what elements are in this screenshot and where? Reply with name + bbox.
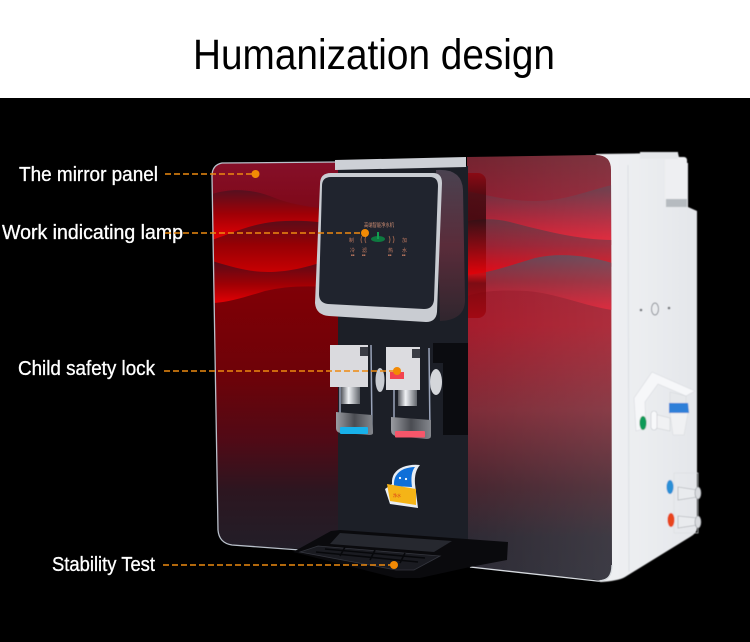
- right faucet (hot) with child lock: [386, 347, 442, 439]
- callout: the mirror panel: [19, 164, 260, 186]
- water inlet tube: [640, 152, 687, 207]
- callout: stability test: [52, 554, 398, 576]
- indicator icons: 水: [402, 247, 407, 254]
- white side body: [590, 152, 701, 582]
- side water tap: [634, 372, 695, 435]
- indicator icons: ■■: [362, 253, 366, 257]
- centre black column: [338, 166, 468, 542]
- title: Humanization design: [193, 31, 555, 79]
- right panel edge highlight: [470, 565, 612, 581]
- side mount screw holes: [640, 303, 670, 315]
- indicator icons: ■■: [388, 253, 392, 257]
- indicator icons: 冷: [350, 247, 355, 254]
- green water indicator: [361, 232, 394, 243]
- indicator brand text: 高端智能净水机: [364, 221, 394, 229]
- control panel: [315, 170, 465, 322]
- callout: child safety lock: [18, 358, 401, 380]
- left mirror panel: [205, 160, 340, 555]
- callout: work indicating lamp: [2, 222, 369, 244]
- indicator icons: 滤: [362, 247, 367, 254]
- dark screen: [319, 177, 438, 309]
- water purifier product: [205, 150, 701, 585]
- top silver strip: [335, 157, 466, 170]
- mascot sticker: [385, 465, 420, 508]
- callout: the mirror panel: The mirror panel: [19, 164, 158, 186]
- indicator icons: 热: [388, 247, 393, 254]
- reflection of control panel: [468, 173, 486, 318]
- drip tray: [293, 530, 508, 578]
- background: white title band: [0, 0, 750, 98]
- mascot sticker: 净水: [393, 492, 401, 498]
- callout: child safety lock: Child safety lock: [18, 358, 156, 380]
- indicator icons: 制: [349, 237, 354, 244]
- panel side bulge: [436, 170, 465, 321]
- callout: work indicating lamp: Work indicating lamp: [2, 222, 183, 244]
- right mirror panel: [460, 150, 615, 585]
- indicator icons: [349, 237, 407, 257]
- indicator icons: 加: [402, 237, 407, 244]
- indicator icons: ■■: [351, 253, 355, 257]
- silver bezel: [315, 173, 442, 322]
- indicator icons: ■■: [402, 253, 406, 257]
- left faucet (cold): [330, 345, 384, 435]
- side water ports: [666, 473, 701, 533]
- left panel edge highlight: [212, 162, 338, 550]
- callout: stability test: Stability Test: [52, 554, 155, 576]
